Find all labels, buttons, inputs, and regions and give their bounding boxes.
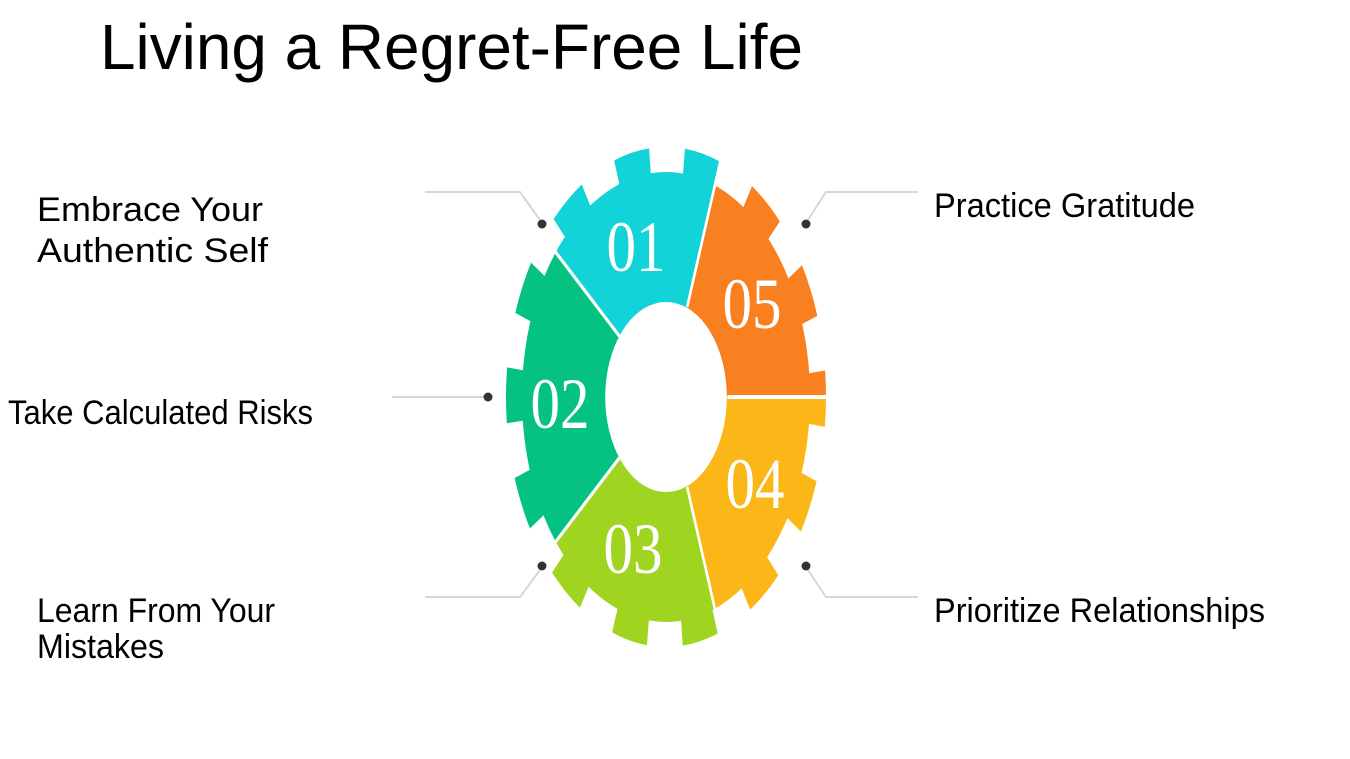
segment 02 green xyxy=(506,254,620,540)
label: Take Calculated Risks: Take Calculated Risks xyxy=(8,394,313,432)
label: Embrace Your Authentic Self: Authentic Self xyxy=(37,232,269,270)
label: Prioritize Relationships: Prioritize Relationships xyxy=(934,592,1265,630)
numbers: 05 xyxy=(722,265,782,344)
numbers: 04 xyxy=(725,445,785,524)
gear diagram xyxy=(500,138,832,656)
label: Learn From Your Mistakes xyxy=(37,592,275,666)
label: Practice Gratitude: Practice Gratitude xyxy=(934,187,1195,225)
segment 01 cyan xyxy=(554,148,719,336)
numbers: 03 xyxy=(603,510,663,589)
numbers: 02 xyxy=(530,365,590,444)
segment 05 orange xyxy=(686,186,826,397)
label: Embrace Your Authentic Self xyxy=(37,191,269,270)
label: Embrace Your Authentic Self: Embrace Your xyxy=(37,191,263,229)
title: Living a Regret-Free Life xyxy=(100,11,803,83)
segment 03 lime xyxy=(552,458,718,646)
label: Learn From Your Mistakes: Mistakes xyxy=(37,628,164,666)
segment 04 yellow xyxy=(686,397,826,610)
connectors xyxy=(392,192,918,597)
label: Learn From Your Mistakes: Learn From Your xyxy=(37,592,275,630)
numbers: 01 xyxy=(606,208,666,287)
numbers xyxy=(530,208,785,589)
